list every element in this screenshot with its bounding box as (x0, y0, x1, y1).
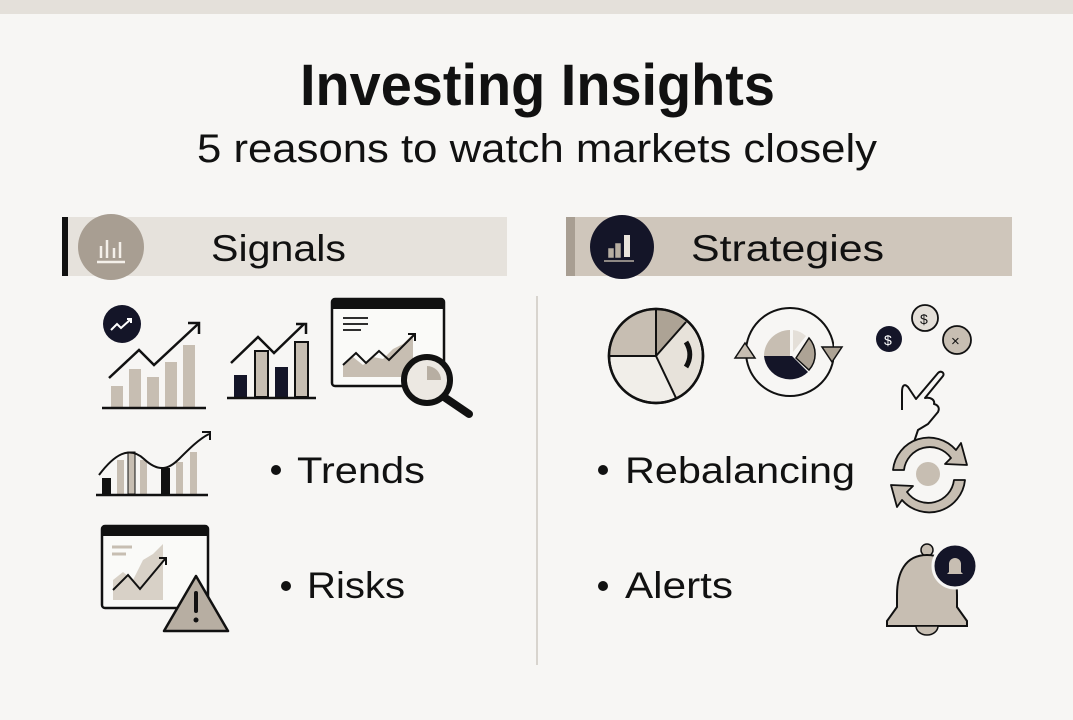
icon: signals badge (78, 214, 144, 280)
panel: signals header (62, 214, 507, 280)
icon: browser with magnifier (332, 299, 469, 414)
icon: rotating pie (730, 308, 848, 396)
icon: hand with coins (876, 305, 971, 442)
icon: bell (887, 544, 977, 635)
text: trends: Trends (297, 450, 425, 491)
panel: strategies header (566, 215, 1012, 279)
icon: pie chart (609, 309, 703, 403)
panel: signals header: Signals (211, 228, 346, 269)
text: risks: Risks (307, 565, 405, 606)
icon: bar chart (227, 324, 316, 398)
text: alerts: Alerts (625, 565, 733, 606)
icon: browser with warning (102, 526, 228, 631)
icon: hand with coins: $ (920, 311, 928, 327)
icon: rebalance arrows (891, 438, 967, 512)
subtitle: 5 reasons to watch markets closely (197, 127, 877, 171)
icon: strategies badge (590, 215, 654, 279)
title: Investing Insights (300, 53, 775, 118)
panel: strategies header: Strategies (691, 228, 884, 269)
icon: rising chart with badge (102, 305, 206, 408)
icon: hand with coins: × (951, 333, 960, 350)
icon: hand with coins: $ (884, 332, 892, 348)
text: rebalancing: Rebalancing (625, 450, 855, 491)
icon: trend bars (96, 432, 210, 495)
